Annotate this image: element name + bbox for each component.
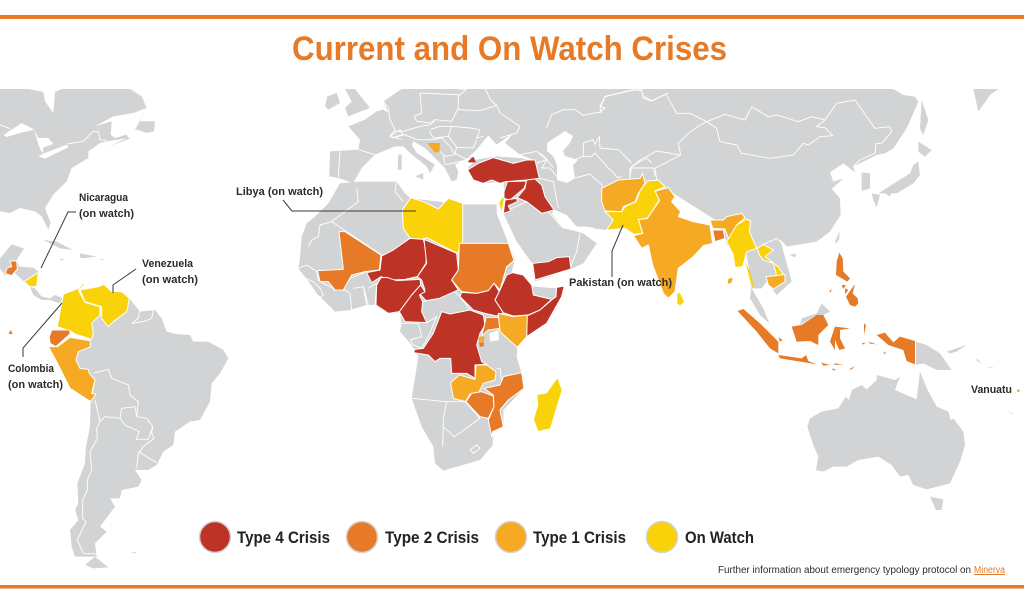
map: africa — [298, 182, 564, 471]
legend: Type 2 Crisis — [346, 522, 479, 552]
legend: Type 1 Crisis — [496, 522, 626, 552]
small pacific territory — [9, 330, 13, 334]
legend — [200, 522, 754, 552]
label: Libya: Libya (on watch) — [236, 186, 323, 198]
label: Colombia: (on watch) — [8, 379, 63, 391]
country: Afghanistan — [602, 173, 645, 212]
legend: Type 4 Crisis — [200, 522, 330, 552]
country: Libya — [402, 198, 463, 253]
country: Mozambique — [484, 373, 524, 437]
label: Nicaragua — [79, 192, 134, 220]
country: Jordan — [503, 198, 517, 213]
country: India — [633, 188, 713, 298]
legend: On Watch — [646, 522, 754, 552]
label: Nicaragua: Nicaragua — [79, 192, 129, 204]
country: Guatemala — [5, 261, 17, 276]
legend: Type 1 Crisis: Type 1 Crisis — [533, 528, 626, 547]
country: Nicaragua — [24, 272, 38, 287]
country: Cameroon — [399, 285, 427, 323]
country: Peru — [48, 337, 96, 402]
country: Indonesia — [738, 309, 915, 370]
country: Pakistan — [605, 180, 665, 234]
footnote: Further information about emergency typology protocol on — [718, 565, 971, 576]
country: Myanmar — [727, 219, 757, 268]
label: Colombia — [8, 363, 63, 391]
map: australia — [807, 372, 1020, 510]
map: central asia borders — [540, 90, 668, 186]
map: central america — [0, 240, 107, 303]
sea: black sea — [469, 133, 537, 161]
country: Kenya — [498, 313, 527, 347]
label: Vanuatu: Vanuatu — [971, 384, 1012, 396]
leader: Nicaragua — [41, 212, 76, 268]
map: south america — [9, 283, 228, 568]
leader: Colombia — [23, 303, 62, 357]
label: Venezuela — [142, 258, 198, 286]
country: Uganda — [482, 317, 500, 336]
leader: Pakistan — [612, 225, 623, 277]
country: DR Congo — [413, 310, 487, 378]
country: Ecuador — [49, 330, 70, 347]
title: Current and On Watch Crises — [292, 30, 727, 68]
leader: Venezuela — [113, 269, 136, 293]
country: Northeast India — [710, 213, 745, 238]
label: Pakistan: Pakistan (on watch) — [569, 277, 672, 289]
legend: Type 2 Crisis: Type 2 Crisis — [385, 528, 479, 547]
country: Zimbabwe — [466, 392, 494, 418]
leader: Libya — [283, 200, 416, 211]
legend: Type 4 Crisis: Type 4 Crisis — [237, 528, 330, 547]
country: Mali — [318, 232, 381, 290]
country: Zambia — [451, 365, 496, 402]
country: Chad — [417, 239, 458, 301]
country: Iraq — [517, 179, 554, 213]
country: Bangladesh — [713, 230, 725, 242]
country: Burundi — [478, 336, 484, 342]
islands: Vanuatu — [1017, 389, 1020, 392]
country: Somalia — [527, 286, 564, 337]
legend: On Watch: On Watch — [685, 528, 754, 547]
map: europe and western asia land — [325, 89, 610, 282]
islands: Andaman — [728, 278, 733, 284]
country: South Sudan — [460, 283, 503, 316]
footnote: Minerva — [974, 565, 1005, 576]
country: Turkey — [468, 158, 539, 183]
country: Yemen — [533, 257, 571, 280]
label: Colombia: Colombia — [8, 363, 55, 375]
country: Philippines — [829, 253, 858, 307]
country: Colombia — [57, 283, 100, 339]
label: Nicaragua: (on watch) — [79, 208, 134, 220]
country: Bosnia — [427, 143, 440, 153]
map: east asia — [593, 89, 998, 323]
label: Venezuela: (on watch) — [142, 274, 198, 286]
country: Madagascar — [534, 378, 562, 431]
country: Venezuela — [80, 284, 129, 327]
country: Ethiopia — [495, 273, 552, 316]
top rule — [0, 15, 1024, 19]
country: Syria — [504, 181, 527, 200]
map: middle east — [468, 157, 580, 280]
country: Cambodia — [766, 274, 785, 289]
country: Palestine — [499, 198, 504, 211]
sea: caspian — [547, 131, 578, 183]
country: Laos — [757, 244, 784, 276]
country: Sri Lanka — [677, 293, 684, 306]
lake victoria — [489, 330, 499, 342]
country: Nigeria — [376, 277, 421, 313]
bottom rule — [0, 585, 1024, 588]
country: Sudan — [452, 243, 514, 293]
map: north america — [0, 89, 155, 230]
country: Niger — [367, 238, 427, 283]
map: south and southeast asia — [602, 173, 995, 370]
label: Venezuela: Venezuela — [142, 258, 194, 270]
